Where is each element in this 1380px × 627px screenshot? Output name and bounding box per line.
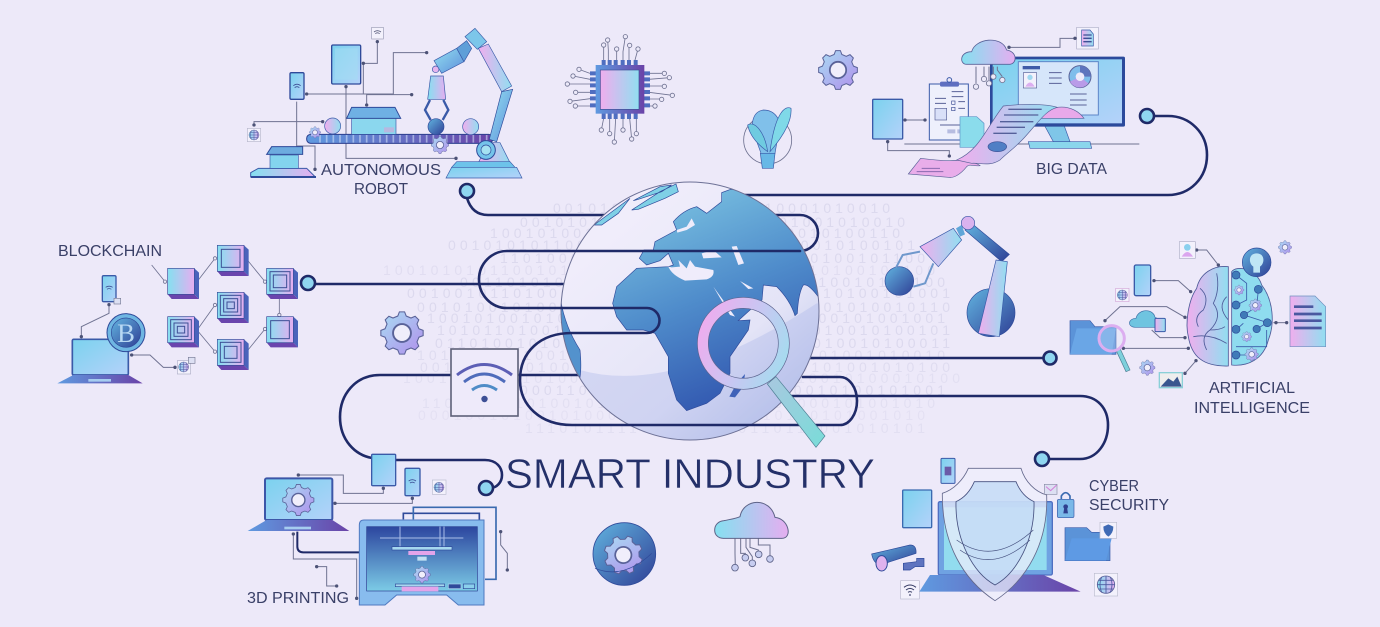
binary code background: 10010100101000101001010001010010100101001001 [427,310,945,326]
globe with magnifier [479,182,857,447]
folder [1065,522,1117,561]
monitor [990,57,1125,148]
base line [904,142,1139,145]
binary code background: 101010010100101001010001010010100101001010010 [417,347,945,363]
balls on belt [325,118,479,135]
binary code background: 0010101011001010010100010100110010100101 [448,237,915,253]
binary code background: 00101001010001001010001010010 [553,200,890,216]
padlock [1057,493,1074,518]
connection terminals [301,109,1154,495]
wiring [80,303,177,369]
panel: artificial intelligence [1070,241,1326,417]
bitcoin coin: B [117,318,135,348]
icon: gear top centre [819,51,857,89]
tablet [372,454,396,486]
binary code background: 001011001010001001010001010010100101001010100 [420,359,950,375]
icon: wifi tag [372,27,383,39]
brain right hemisphere [1232,268,1272,365]
gear lower [1140,360,1155,375]
chain links [152,257,281,353]
globe tag [177,357,195,374]
3D printer [359,520,484,605]
label: cyber security: CYBER [1089,478,1139,495]
label: blockchain: BLOCKCHAIN [58,243,162,260]
globe tag [1116,288,1129,302]
person tag [1179,242,1195,258]
label: 3D printing: 3D PRINTING [247,590,349,607]
security camera [872,545,924,571]
phone [290,73,304,99]
binary code background: 001010010100101001010001010100101001010010110 [417,299,950,315]
binary code background: 00110101010010100010101001001010010110100 [460,274,945,290]
connector lines behind globe [315,116,1207,488]
icon: globe tag [247,128,261,142]
binary code background: 001010110010100101000101001010010 [520,214,905,230]
binary code background: 10010100101100101000101010010100110 [490,225,900,241]
binary code background: 110100010101000101010010010100101100 [500,250,925,266]
phone [1134,265,1151,296]
phone [405,468,420,496]
panel: autonomous robot [247,27,522,198]
gear [1278,241,1292,254]
label: autonomous robot: ROBOT [354,181,408,198]
robot gripper [425,66,448,120]
picture [1159,373,1182,388]
icon: wifi box [451,349,518,416]
continents [560,184,827,443]
panel: big data [873,27,1139,178]
blocks [168,245,298,370]
label: big data: BIG DATA [1036,161,1107,178]
magnifier [697,297,825,447]
robot arm [434,28,522,178]
label: autonomous robot: AUTONOMOUS [321,162,441,179]
check tag [1044,484,1057,494]
icon: gear globe [593,523,656,585]
front lines crossing the globe [479,251,857,425]
label: cyber security: SECURITY [1089,497,1169,514]
file [960,117,984,147]
panel: cyber security [872,458,1169,601]
binary code background: 10010101001010010100101000101001010010100010100 [403,370,960,386]
binary code background: 11010100101001010001010010100101000101001010 [422,395,935,411]
icon: cloud network [715,502,788,571]
phone [941,458,955,483]
clipboard [929,78,968,140]
box on belt [347,107,401,134]
binary code background: 01101001010001010010100010101001010010100011 [435,335,950,351]
label: artificial intelligence: ARTIFICIAL [1209,380,1295,397]
label: artificial intelligence [1194,380,1310,417]
brain left hemisphere [1187,266,1228,366]
document [1290,296,1326,347]
shield [942,468,1047,601]
bulb badge [1242,248,1271,277]
icon: plant bulb [744,108,792,168]
binary code background: 10010101011001011001010001010010100010100101100 [383,262,935,278]
phone [102,276,121,304]
bitcoin coin [107,314,145,352]
globe outline [561,182,819,440]
label: cyber security [1089,478,1169,514]
icon: robot claw with ball [885,216,1015,337]
wiring [1103,248,1288,375]
label: autonomous robot [321,162,441,198]
binary code background: 0001001010010100010101001010010100101001010 [418,407,925,423]
tablet [873,99,951,158]
wiring [292,473,509,600]
panel: 3D printing [247,454,509,607]
laptop [57,339,143,383]
icon: microchip [565,34,674,144]
binary code background: 10101101001010100010100101010001010010100101 [437,322,950,338]
label: artificial intelligence: INTELLIGENCE [1194,400,1310,417]
globe tag [432,480,446,494]
globe sphere [561,182,819,440]
title: SMART INDUSTRY [505,450,875,497]
binary code background: 0010010110100010100101000101001010010100101001 [407,285,950,301]
panel: blockchain [57,243,298,383]
cloud [962,40,1015,89]
tablet [903,490,932,528]
cloud and phone [1129,311,1165,332]
globe tag [1094,573,1118,596]
conveyor belt [307,134,493,143]
binary code background [383,200,960,436]
connector wiring [252,40,458,171]
laptop [919,502,1081,592]
binary code background: 1110101111010001010110111001010101 [525,420,925,436]
left machine [251,147,316,178]
printer cables [297,507,496,579]
gears on belt [309,127,449,154]
laptop with gear [248,478,349,531]
printed data ribbon [908,104,1084,178]
binary code background: 000110100101001010001010010100101001 [520,382,945,398]
doc tag [1007,27,1098,49]
wifi tag [901,581,919,599]
tablet [332,45,361,84]
icon: gear left of wifi [381,312,423,354]
folder with magnifier [1070,321,1130,372]
